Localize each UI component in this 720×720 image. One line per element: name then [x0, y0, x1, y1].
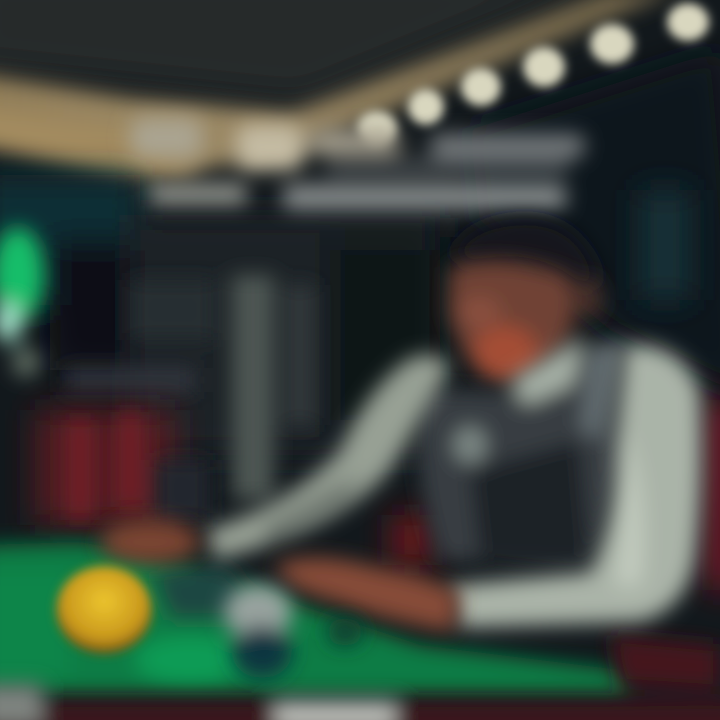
vest — [418, 335, 625, 565]
right sleeve — [450, 345, 702, 628]
left sleeve — [205, 355, 450, 560]
face — [448, 260, 602, 383]
right dark wall — [470, 50, 720, 400]
hair — [450, 218, 600, 295]
green neon sign — [0, 227, 44, 377]
ceiling — [0, 0, 620, 100]
mid-left teal wall — [0, 175, 690, 455]
player — [100, 218, 702, 632]
grey column — [65, 275, 315, 500]
red seats — [35, 400, 720, 590]
table felt — [0, 542, 630, 695]
table rail — [0, 635, 720, 720]
cue ball and dark ball — [224, 584, 363, 678]
ceiling beam — [0, 0, 680, 180]
yellow ball — [56, 566, 152, 654]
ceiling lights — [357, 3, 709, 145]
hands — [100, 520, 460, 632]
blurred title — [130, 118, 585, 209]
